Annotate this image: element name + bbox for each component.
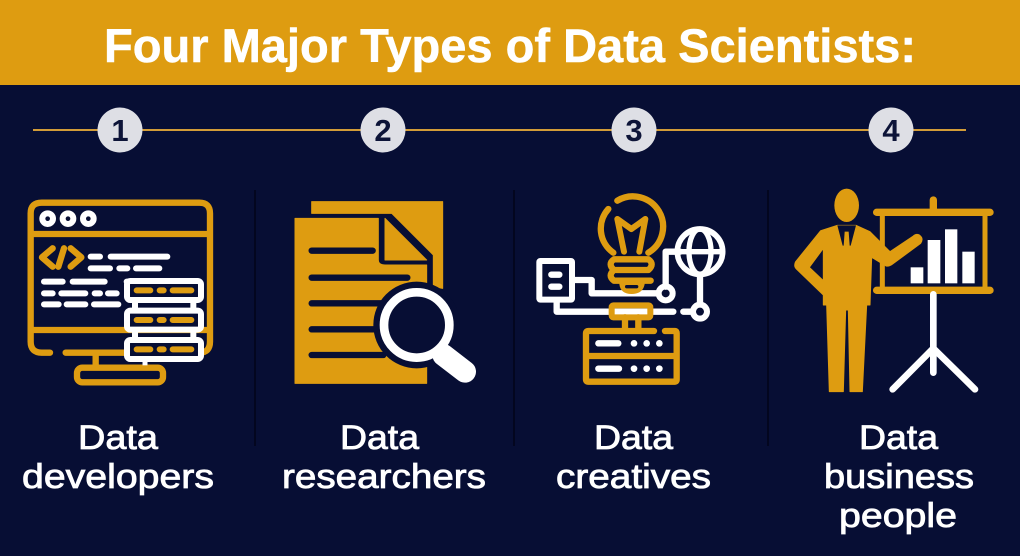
header banner <box>0 0 1020 85</box>
step number 4 <box>868 108 914 152</box>
title: Four Major Types of Data Scientists: <box>104 19 916 72</box>
label: data business people <box>824 419 974 535</box>
step number 3: 3 <box>625 113 643 148</box>
step number 1: 1 <box>111 113 129 148</box>
step number 1 <box>98 108 142 152</box>
step number 2 <box>360 108 406 152</box>
icon: presenter with chart easel <box>795 189 990 392</box>
step number 2: 2 <box>374 113 392 148</box>
label: data creatives <box>556 419 711 496</box>
label: data researchers: researchers <box>282 458 486 496</box>
step number 3 <box>612 108 656 152</box>
icon: documents with magnifying glass <box>295 202 465 383</box>
icon: light bulb, globe and server <box>539 196 723 382</box>
label: data developers <box>22 419 214 496</box>
label: data researchers: Data <box>340 419 419 457</box>
label: data creatives: creatives <box>556 458 711 496</box>
label: data creatives: Data <box>594 419 673 457</box>
icon: monitor with code and server <box>31 203 210 382</box>
label: data developers: developers <box>22 458 214 496</box>
label: data business people: people <box>839 497 957 535</box>
label: data business people: business <box>824 458 974 496</box>
label: data researchers <box>282 419 486 496</box>
step number 4: 4 <box>882 113 900 148</box>
label: data developers: Data <box>78 419 158 457</box>
label: data business people: Data <box>859 419 938 457</box>
